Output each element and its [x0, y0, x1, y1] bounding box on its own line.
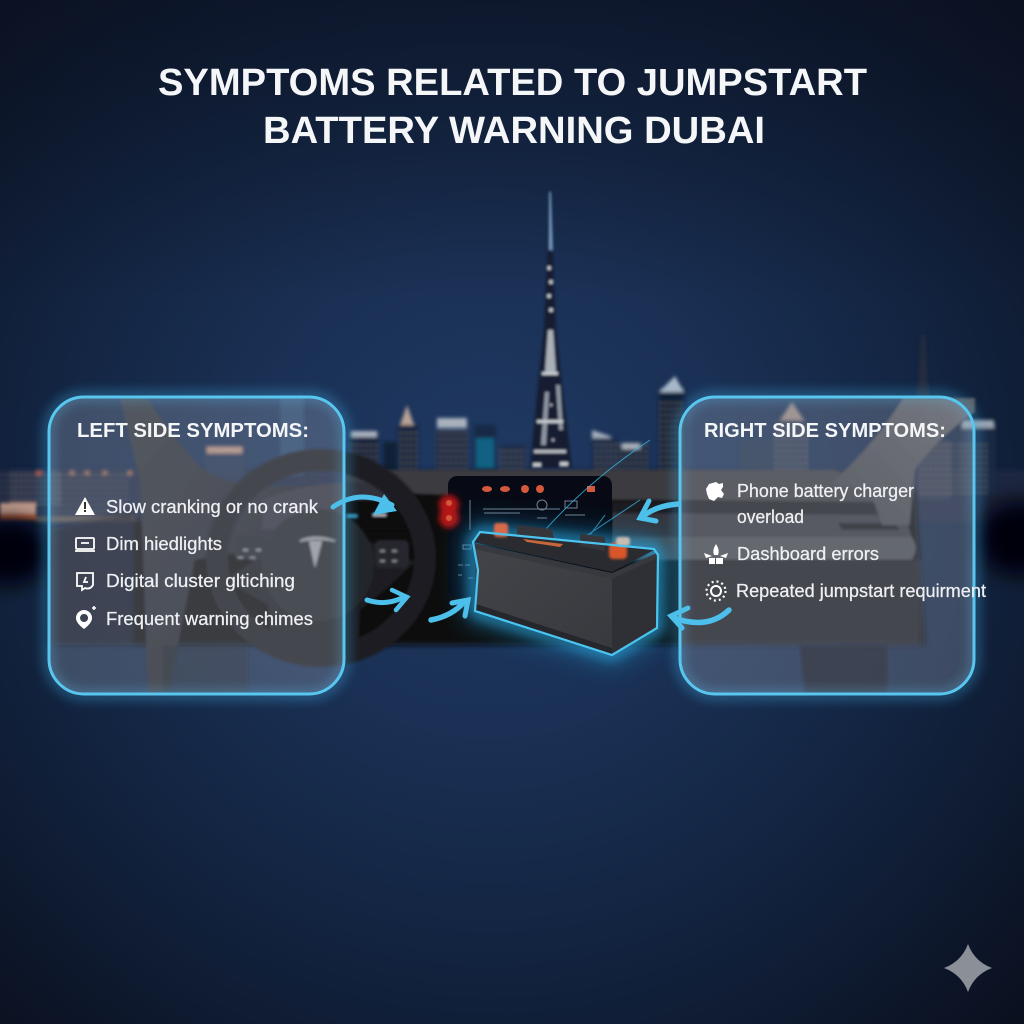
arrow: dim headlights — [367, 590, 407, 610]
battery terminals — [494, 523, 630, 559]
icon: sun gear — [706, 582, 726, 600]
heading: right panel: RIGHT SIDE SYMPTOMS: — [704, 420, 946, 442]
arrows pointing to battery — [333, 494, 729, 628]
illustration: car battery — [473, 523, 658, 655]
icon: chime pin — [76, 606, 96, 629]
icon: warning triangle — [75, 497, 95, 515]
battery outline — [473, 532, 658, 655]
icon: headlight display — [75, 538, 95, 551]
arrow: right upper — [640, 501, 678, 521]
text: phone charger: Phone battery charger — [737, 481, 914, 501]
arrow: slow cranking — [333, 494, 397, 515]
battery glow — [473, 532, 658, 655]
illustration: Burj Khalifa tower — [530, 186, 572, 468]
title: SYMPTOMS RELATED TO JUMPSTART — [158, 62, 867, 104]
icon: phone charger gear — [706, 482, 724, 501]
battery body — [473, 525, 657, 654]
text: overload: overload — [737, 507, 804, 527]
text: warning chimes: Frequent warning chimes — [106, 609, 313, 629]
text: repeated jumpstart: Repeated jumpstart requirment — [736, 581, 986, 601]
illustration: infotainment screen — [439, 440, 650, 598]
text: slow cranking: Slow cranking or no crank — [106, 497, 319, 517]
icon: dashboard errors — [704, 544, 728, 564]
panel: right side symptoms — [679, 396, 986, 695]
title: BATTERY WARNING DUBAI — [263, 110, 765, 152]
title — [158, 62, 867, 152]
text: digital cluster: Digital cluster gltiching — [106, 571, 295, 591]
illustration: city skyline — [0, 335, 1024, 586]
illustration: steering wheel — [217, 460, 425, 656]
arrow: right lower — [671, 608, 729, 628]
icon: cluster glitch — [77, 573, 93, 590]
icon: sparkle watermark — [944, 944, 992, 992]
icon: Tesla logo — [300, 538, 335, 568]
arrow: dash lower-left — [431, 600, 468, 620]
illustration: car interior dashboard — [48, 398, 975, 695]
text: dim headlights: Dim hiedlights — [106, 534, 222, 554]
panel: left side symptoms — [48, 396, 345, 695]
text: dashboard errors: Dashboard errors — [737, 544, 879, 564]
heading: left panel: LEFT SIDE SYMPTOMS: — [77, 420, 309, 442]
